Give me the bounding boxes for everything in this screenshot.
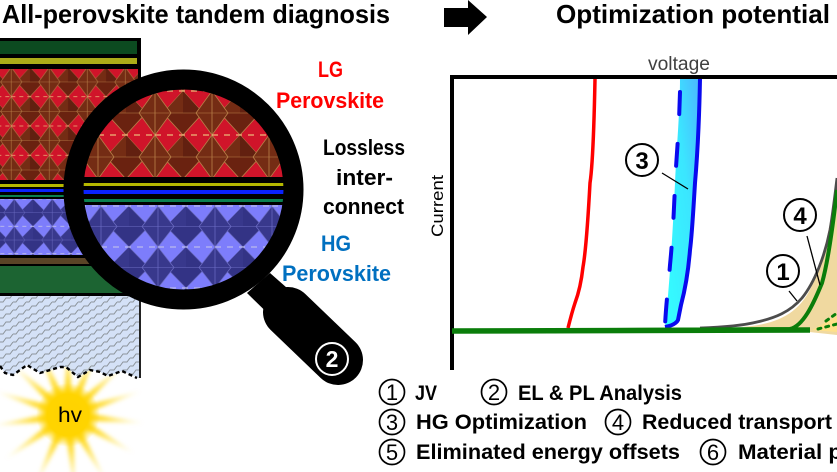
- axes: [452, 77, 837, 370]
- callout: 3: 3: [635, 148, 649, 175]
- curve: blue solid: [665, 79, 700, 327]
- curve: grey measured JV: [700, 178, 837, 328]
- legend item 1: [380, 380, 437, 405]
- callout: 1: [767, 255, 799, 301]
- curve: green dotted: [818, 313, 837, 329]
- legend item 3: 3: [386, 410, 398, 435]
- baseline: green thick: [452, 330, 810, 331]
- lens: HG perovskite: [80, 205, 286, 293]
- legend item 3: HG Optimization: [416, 411, 587, 434]
- legend item 4: Reduced transport: [642, 411, 832, 434]
- interconnect: yellow line: [0, 184, 138, 187]
- region: transport and offset losses: [740, 180, 837, 335]
- label: LG perovskite: [276, 57, 384, 113]
- curve: green reduced transport: [452, 190, 837, 331]
- layer: brown contact: [0, 258, 138, 264]
- badge: number 2: 2: [326, 346, 338, 372]
- panel: magnified lens view: [80, 85, 286, 293]
- lens: yellow line: [80, 183, 286, 186]
- label: lossless interconnect: connect: [323, 194, 405, 219]
- curve: red LG subcell: [568, 79, 595, 328]
- layer: top electrode: [0, 41, 137, 54]
- label: lossless interconnect: Lossless: [323, 135, 405, 160]
- icon: magnifying glass ring: [74, 80, 294, 300]
- lens: blue line: [80, 190, 286, 194]
- label: LG perovskite: LG: [318, 57, 343, 82]
- legend item 2: 2: [488, 380, 500, 405]
- region: potential of HG optimization: [665, 79, 700, 327]
- label: HG perovskite: [282, 231, 391, 286]
- label: lossless interconnect: [323, 135, 405, 219]
- legend item 1: JV: [415, 382, 437, 405]
- callout: 4: [784, 199, 820, 285]
- curve: blue dashed: [665, 92, 680, 326]
- callout: 1: 1: [776, 259, 790, 286]
- interconnect: green line: [0, 195, 138, 197]
- legend item 5: Eliminated energy offsets: [416, 441, 680, 464]
- layer: HG perovskite: [0, 199, 138, 255]
- label: HG perovskite: HG: [321, 231, 351, 256]
- lens: green line: [80, 199, 286, 202]
- label: LG perovskite: Perovskite: [276, 88, 384, 113]
- callout: 4: 4: [793, 203, 807, 230]
- lens: LG perovskite: [80, 86, 286, 177]
- legend item 5: 5: [386, 440, 398, 465]
- layer: bottom electrode: [0, 266, 138, 293]
- label: HG perovskite: Perovskite: [282, 261, 391, 286]
- legend item 4: 4: [612, 410, 624, 435]
- panel: tandem device stack: [0, 38, 141, 296]
- legend: numbered optimization steps: [380, 380, 837, 465]
- legend item 1: 1: [386, 380, 398, 405]
- icon: sun with hv label: hv: [58, 404, 83, 427]
- chart: current-voltage curves: [428, 54, 837, 370]
- callout: 3: [626, 144, 688, 189]
- legend item 6: Material p: [738, 441, 837, 464]
- arrow: diagnosis to optimization: [444, 0, 487, 35]
- label: lossless interconnect: inter-: [336, 165, 393, 190]
- layer: LG perovskite: [0, 69, 138, 180]
- legend item 2: EL & PL Analysis: [518, 382, 682, 405]
- legend item 6: [700, 440, 837, 465]
- icon: magnifying glass handle: [247, 273, 348, 375]
- interconnect: blue line: [0, 189, 138, 192]
- layer: olive contact: [0, 58, 137, 64]
- axis label: voltage: voltage: [648, 54, 710, 75]
- icon: sun with hv label: [0, 337, 146, 472]
- axis label: current: Current: [428, 175, 447, 237]
- legend item 6: 6: [707, 440, 719, 465]
- panel: glass substrate: [0, 295, 140, 378]
